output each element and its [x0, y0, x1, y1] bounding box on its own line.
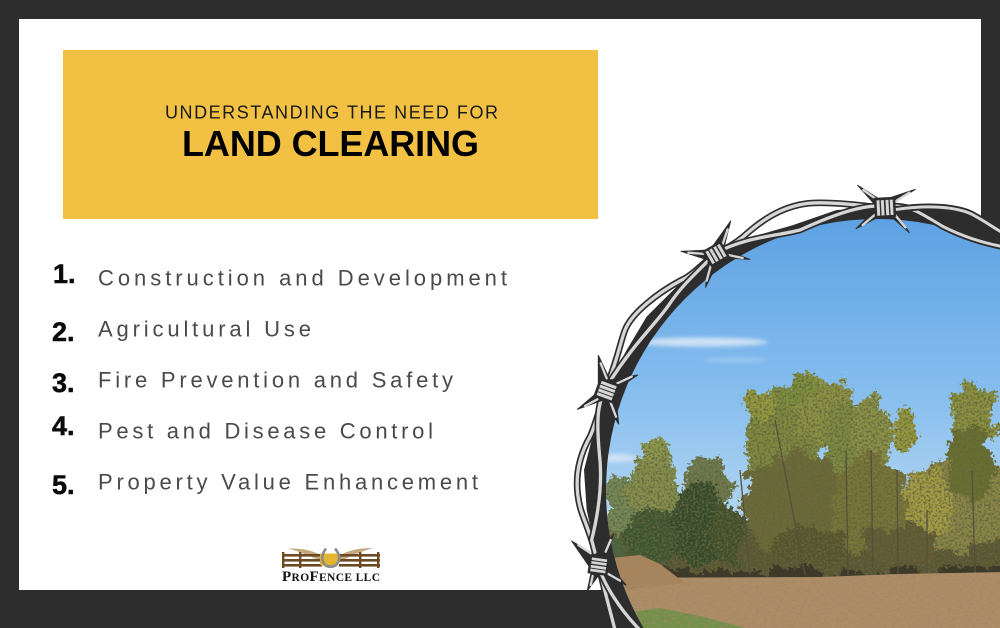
- tree base: [600, 545, 1000, 579]
- logo wordmark: PROFENCE LLC: [282, 569, 380, 585]
- item 2: 2.: [52, 317, 75, 347]
- barb: top: [856, 185, 915, 233]
- dark evergreen trees: [672, 483, 724, 567]
- ground: [590, 572, 1000, 628]
- barb: left: [577, 355, 638, 424]
- barb: upper left: [681, 221, 750, 287]
- item 1: Construction and Development: [98, 266, 507, 290]
- icon: horns: [288, 548, 373, 562]
- item 2: [52, 316, 311, 347]
- item 2: Agricultural Use: [98, 316, 311, 342]
- barb: bottom: [572, 535, 626, 591]
- item 3: Fire Prevention and Safety: [98, 368, 453, 392]
- item 4: Pest and Disease Control: [98, 418, 433, 444]
- photo of cleared land in barbed wire frame: [572, 185, 1000, 628]
- tall centre trees: [749, 386, 821, 494]
- title: LAND CLEARING: [182, 123, 479, 164]
- item 1: 1.: [53, 259, 76, 289]
- inner wire: [592, 206, 885, 628]
- background trees: [600, 520, 1000, 572]
- photo: [590, 210, 1000, 628]
- barbed wire: [572, 185, 1000, 628]
- brush pile: [612, 555, 685, 590]
- numbered list: [52, 259, 507, 500]
- sky: [590, 210, 1000, 628]
- green weeds: [632, 608, 745, 628]
- right tree: [953, 383, 997, 447]
- icon: horseshoe: [322, 548, 339, 567]
- clouds: [593, 338, 768, 462]
- wire shadow band: [584, 205, 1000, 628]
- right wires: [885, 206, 1000, 247]
- tree line: [600, 376, 1000, 572]
- item 3: 3.: [52, 368, 75, 398]
- outer wire: [577, 203, 885, 628]
- item 4: 4.: [52, 411, 75, 441]
- item 4: [52, 411, 433, 444]
- icon: fence: [282, 552, 380, 568]
- item 5: Property Value Enhancement: [98, 470, 478, 494]
- item 5: 5.: [52, 470, 75, 500]
- trunks: [740, 420, 975, 575]
- title banner: [63, 50, 598, 219]
- icon: gold centre: [320, 554, 338, 566]
- logo: ProFence LLC: [282, 548, 380, 585]
- title kicker: UNDERSTANDING THE NEED FOR: [165, 102, 498, 122]
